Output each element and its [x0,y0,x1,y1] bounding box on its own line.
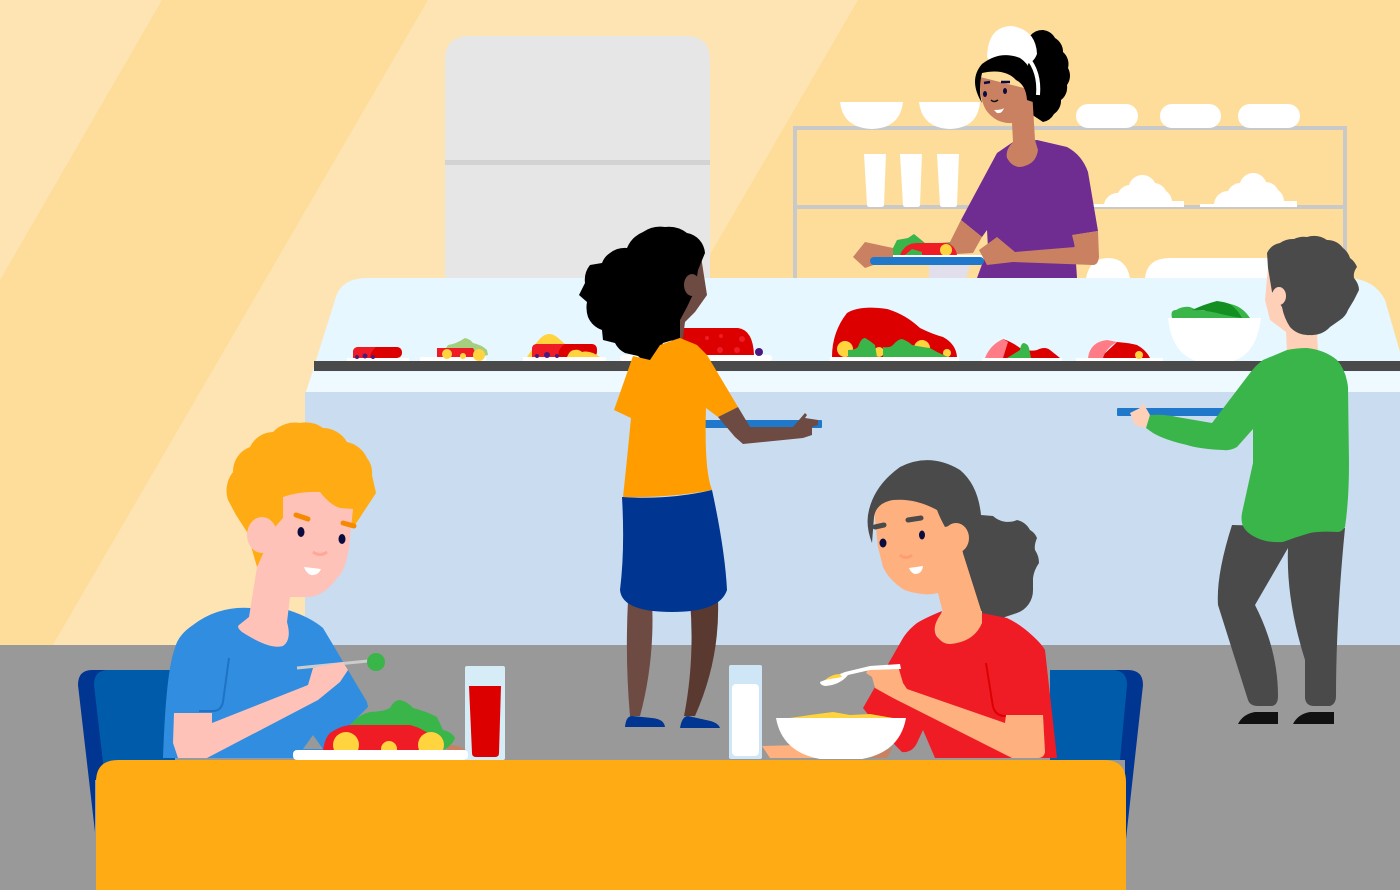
collar [935,611,982,644]
skirt [620,490,727,612]
ponytail front [963,553,1000,623]
girl in orange [579,227,818,728]
plates [347,355,1163,361]
server neck and face [980,77,1038,167]
gap under elbow [303,735,323,749]
ponytail [950,500,1039,621]
hair [579,227,705,361]
glasses on shelf [864,154,959,207]
shirt [863,611,1057,758]
dish four [680,328,763,356]
server [853,26,1099,278]
server shirt [961,140,1098,278]
server left arm [853,220,982,268]
server right arm [979,231,1099,265]
bench right inner [1050,670,1127,760]
shirt [163,608,368,758]
face and neck [874,490,982,644]
second hand behind bowl [870,747,893,758]
ear [684,274,700,296]
shoes [625,716,720,728]
food on counter [347,301,1261,362]
bowls on shelf [840,102,1300,129]
girl in red [762,460,1057,758]
dish two [437,338,488,361]
rice bowl [776,712,906,759]
shoes [1238,712,1334,724]
ear [943,523,969,553]
legs [627,600,718,716]
hand behind plate [447,745,466,750]
arm [173,662,348,758]
sleeve seam [986,663,1018,716]
bench left inner [94,670,175,780]
ear [247,517,277,553]
glass of milk [729,665,762,759]
fork and pea [297,653,385,671]
salad bowl [1168,301,1261,362]
plate [293,750,468,760]
bench right [1050,670,1143,848]
facial features [875,518,925,574]
counter glass [306,278,1400,392]
face and neck [238,492,353,647]
fridge [445,36,710,278]
server tray with food [870,234,984,278]
dish three [527,334,600,358]
arm behind bowl [762,745,850,758]
neck and face [1265,268,1318,352]
rice piles on shelf [1092,173,1297,207]
server headband [1027,57,1038,95]
server hair [975,55,1034,103]
counter rail [314,361,1400,371]
tray boy [1117,408,1227,416]
server cap [987,26,1037,64]
floor [0,645,1400,890]
trousers [1218,525,1345,706]
ear [1272,287,1286,305]
plates lower shelf [1086,258,1270,278]
hair [868,460,981,543]
face and neck [670,250,707,345]
shelves [795,128,1345,278]
sweater [1146,348,1349,542]
small dish pink and green [985,339,1060,358]
server face details [983,82,1010,113]
hair [1267,236,1359,335]
dish one [353,347,402,359]
small dish pink [1088,340,1150,359]
large dish [832,308,957,357]
facial features [296,515,354,575]
hair [227,422,376,567]
boy in blue [163,422,385,758]
tray girl [703,420,822,428]
wall [0,0,1400,650]
corn [333,732,444,758]
bench left [78,670,175,832]
meat [323,725,437,750]
server ponytail [1025,30,1070,122]
table [96,760,1126,890]
hand [1130,403,1150,428]
sleeve seam [199,658,229,711]
spoon [820,664,901,686]
arm [866,666,1045,758]
boy in green [1130,236,1359,724]
shirt [614,338,738,497]
glass of juice [465,666,505,760]
arm [718,407,818,444]
salad [350,700,455,750]
counter body [305,392,1400,645]
plate with food [293,700,468,760]
